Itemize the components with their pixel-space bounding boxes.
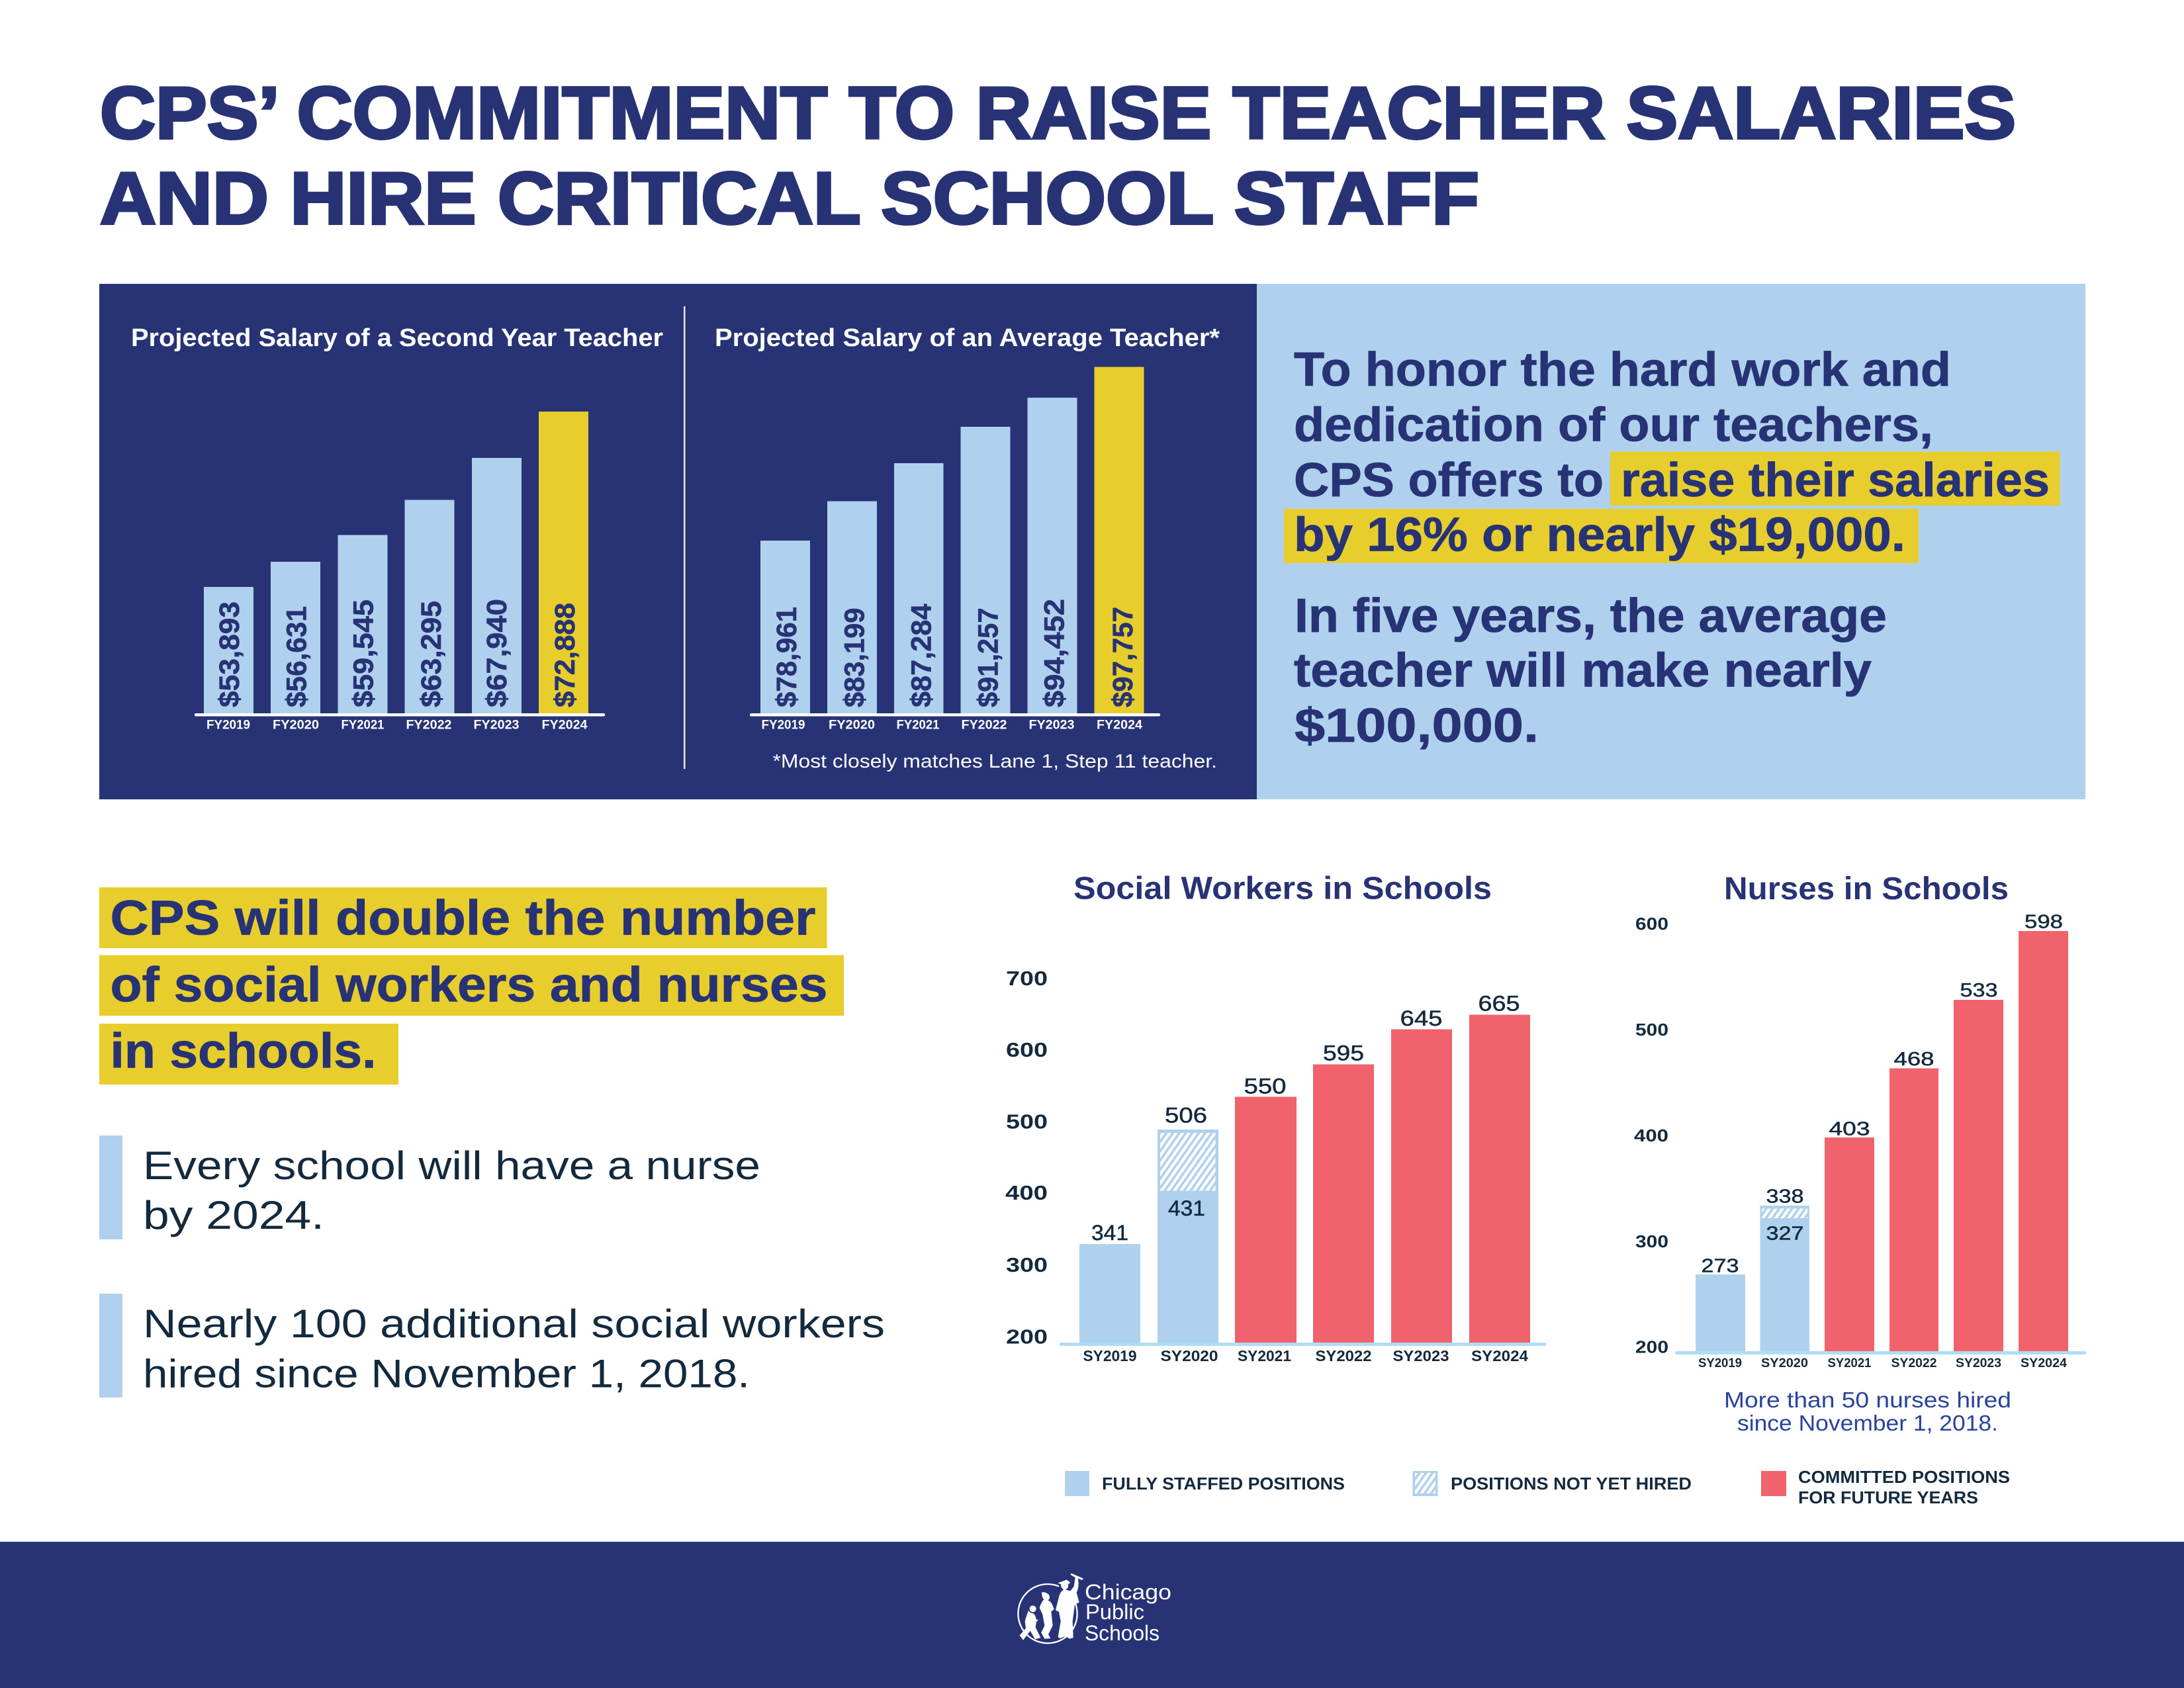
chart: social workers in schools: 665 bbox=[1479, 991, 1520, 1015]
chart: social workers in schools: 400 bbox=[1005, 1181, 1048, 1204]
chart: average teacher salary: $94,452 bbox=[1039, 599, 1071, 707]
chart: social workers in schools: SY2024 bbox=[1471, 1347, 1528, 1364]
title: CPS’ COMMITMENT TO RAISE TEACHER SALARIES bbox=[100, 72, 2016, 154]
legend item: fully staffed positions: FULLY STAFFED POSITIONS bbox=[1102, 1474, 1345, 1493]
chart: social workers in schools: SY2021 bbox=[1238, 1347, 1291, 1364]
footnote: *Most closely matches Lane 1, Step 11 teacher. bbox=[773, 751, 1217, 772]
logo wordmark: Schools bbox=[1085, 1621, 1160, 1645]
logo wordmark: Public bbox=[1085, 1600, 1144, 1624]
panel: teacher raise message: by 16% or nearly $19,000. bbox=[1294, 508, 1905, 561]
logo: Chicago Public Schools bbox=[1018, 1574, 1171, 1645]
heading: nurses: Nurses in Schools bbox=[1724, 871, 2009, 907]
heading: second year teacher: Projected Salary of a Second Year Teacher bbox=[131, 324, 663, 352]
chart: social workers in schools bbox=[1005, 871, 1546, 1364]
text block: additional social workers: Nearly 100 additional social workers bbox=[143, 1302, 885, 1346]
chart: average teacher salary: $97,757 bbox=[1107, 607, 1139, 707]
chart: nurses in schools: 400 bbox=[1634, 1126, 1668, 1145]
headline: double social workers and nurses bbox=[99, 887, 844, 1085]
chart: second year teacher salary bbox=[131, 324, 663, 732]
chart: social workers in schools: 595 bbox=[1323, 1042, 1364, 1065]
chart: average teacher salary bbox=[715, 324, 1220, 772]
legend item: committed positions: FOR FUTURE YEARS bbox=[1798, 1488, 1978, 1507]
chart: second year teacher salary: FY2021 bbox=[341, 719, 385, 732]
logo wordmark: Chicago bbox=[1085, 1580, 1171, 1604]
panel: teacher raise message: CPS offers to bbox=[1294, 454, 1604, 507]
chart: social workers in schools: 700 bbox=[1006, 967, 1048, 990]
chart: social workers in schools: 550 bbox=[1244, 1075, 1287, 1098]
chart: nurses in schools: 273 bbox=[1701, 1256, 1739, 1277]
chart: nurses in schools: 327 bbox=[1766, 1223, 1804, 1244]
chart: average teacher salary: FY2019 bbox=[761, 719, 805, 732]
text block: every school nurse: Every school will have a nurse bbox=[143, 1143, 760, 1188]
chart: average teacher salary: $78,961 bbox=[771, 607, 803, 707]
chart: average teacher salary: $83,199 bbox=[839, 607, 871, 707]
chart: second year teacher salary: $53,893 bbox=[214, 601, 246, 707]
chart: second year teacher salary: $67,940 bbox=[481, 599, 513, 707]
chart: average teacher salary: $87,284 bbox=[905, 603, 937, 707]
chart: average teacher salary: FY2020 bbox=[829, 719, 875, 732]
chart: nurses in schools: SY2019 bbox=[1698, 1356, 1742, 1370]
chart: nurses in schools: SY2024 bbox=[2021, 1356, 2067, 1370]
chart: social workers in schools: 500 bbox=[1006, 1110, 1048, 1133]
chart: social workers in schools: 506 bbox=[1165, 1104, 1207, 1128]
legend item: fully staffed positions bbox=[1065, 1471, 1345, 1496]
headline: double social workers and nurses: CPS will double the number bbox=[110, 891, 815, 945]
footer band bbox=[0, 1542, 2184, 1688]
note: nurses hired: since November 1, 2018. bbox=[1737, 1411, 1998, 1435]
legend bbox=[1065, 1467, 2010, 1507]
chart: nurses in schools: 500 bbox=[1635, 1020, 1668, 1040]
text block: additional social workers: hired since November 1, 2018. bbox=[143, 1351, 750, 1396]
chart: social workers in schools: 200 bbox=[1006, 1325, 1048, 1349]
chart: nurses in schools: SY2023 bbox=[1956, 1356, 2001, 1370]
chart: nurses in schools: SY2020 bbox=[1761, 1356, 1808, 1370]
headline: double social workers and nurses: in schools. bbox=[110, 1023, 376, 1079]
chart: social workers in schools: 300 bbox=[1006, 1253, 1048, 1276]
text block: every school nurse: by 2024. bbox=[143, 1193, 324, 1237]
chart: social workers in schools: 431 bbox=[1168, 1196, 1205, 1220]
panel: projected salaries bbox=[99, 284, 1257, 799]
chart: second year teacher salary: FY2019 bbox=[206, 719, 250, 732]
panel: teacher raise message: dedication of our teachers, bbox=[1294, 398, 1933, 451]
heading: social workers: Social Workers in Schools bbox=[1073, 871, 1492, 907]
chart: second year teacher salary: FY2020 bbox=[273, 719, 319, 732]
chart: nurses in schools: 468 bbox=[1894, 1049, 1934, 1070]
note: nurses hired: More than 50 nurses hired bbox=[1724, 1388, 2011, 1412]
chart: social workers in schools: SY2019 bbox=[1083, 1347, 1137, 1364]
chart: second year teacher salary: FY2023 bbox=[474, 719, 519, 732]
panel: teacher raise message: In five years, the average bbox=[1295, 590, 1887, 643]
chart: social workers in schools: SY2020 bbox=[1161, 1347, 1218, 1364]
panel: teacher raise message: teacher will make nearly bbox=[1294, 644, 1872, 697]
chart: nurses in schools: 403 bbox=[1829, 1118, 1870, 1139]
panel: teacher raise message bbox=[1257, 284, 2085, 799]
chart: nurses in schools bbox=[1634, 871, 2086, 1435]
panel: teacher raise message: $100,000. bbox=[1295, 699, 1539, 752]
chart: second year teacher salary: FY2022 bbox=[406, 719, 451, 732]
logo wordmark bbox=[1085, 1580, 1171, 1645]
chart: social workers in schools: SY2023 bbox=[1392, 1347, 1449, 1364]
title bbox=[100, 72, 2016, 240]
chart: social workers in schools: 645 bbox=[1400, 1006, 1443, 1030]
chart: social workers in schools: 341 bbox=[1091, 1221, 1128, 1245]
icon: school figures in circle bbox=[1018, 1574, 1083, 1643]
chart: nurses in schools: SY2022 bbox=[1891, 1356, 1936, 1370]
chart: nurses in schools: 533 bbox=[1960, 980, 1997, 1001]
legend item: positions not yet hired: POSITIONS NOT YET HIRED bbox=[1451, 1474, 1692, 1493]
chart: average teacher salary: FY2023 bbox=[1028, 719, 1075, 732]
panel: teacher raise message: To honor the hard work and bbox=[1294, 343, 1951, 396]
chart: second year teacher salary: FY2024 bbox=[541, 719, 588, 732]
chart: nurses in schools: 300 bbox=[1635, 1231, 1668, 1251]
chart: nurses in schools: 600 bbox=[1635, 914, 1668, 934]
chart: nurses in schools: 338 bbox=[1766, 1186, 1804, 1207]
note: nurses hired bbox=[1724, 1388, 2011, 1435]
chart: second year teacher salary: $72,888 bbox=[549, 603, 581, 707]
chart: social workers in schools: 600 bbox=[1006, 1038, 1048, 1061]
text block: additional social workers bbox=[99, 1294, 885, 1398]
headline: double social workers and nurses: of social workers and nurses bbox=[110, 957, 827, 1012]
panel: teacher raise message: raise their salaries bbox=[1621, 454, 2050, 507]
chart: nurses in schools: SY2021 bbox=[1828, 1356, 1872, 1370]
text block: every school nurse bbox=[99, 1135, 760, 1239]
title: AND HIRE CRITICAL SCHOOL STAFF bbox=[100, 157, 1479, 240]
legend item: committed positions: COMMITTED POSITIONS bbox=[1798, 1467, 2010, 1487]
chart: nurses in schools: 598 bbox=[2025, 912, 2063, 933]
chart: nurses in schools: 200 bbox=[1635, 1337, 1668, 1356]
chart: average teacher salary: FY2021 bbox=[896, 719, 940, 732]
legend item: committed positions bbox=[1761, 1467, 2010, 1507]
chart: second year teacher salary: $56,631 bbox=[281, 606, 312, 707]
chart: average teacher salary: FY2022 bbox=[961, 719, 1007, 732]
chart: average teacher salary: $91,257 bbox=[973, 607, 1005, 707]
legend item: positions not yet hired bbox=[1412, 1471, 1692, 1496]
chart: social workers in schools: SY2022 bbox=[1316, 1347, 1371, 1364]
chart: second year teacher salary: $59,545 bbox=[348, 600, 380, 707]
chart: second year teacher salary: $63,295 bbox=[416, 601, 447, 707]
heading: average teacher: Projected Salary of an Average Teacher* bbox=[715, 324, 1220, 352]
chart: average teacher salary: FY2024 bbox=[1097, 719, 1142, 732]
